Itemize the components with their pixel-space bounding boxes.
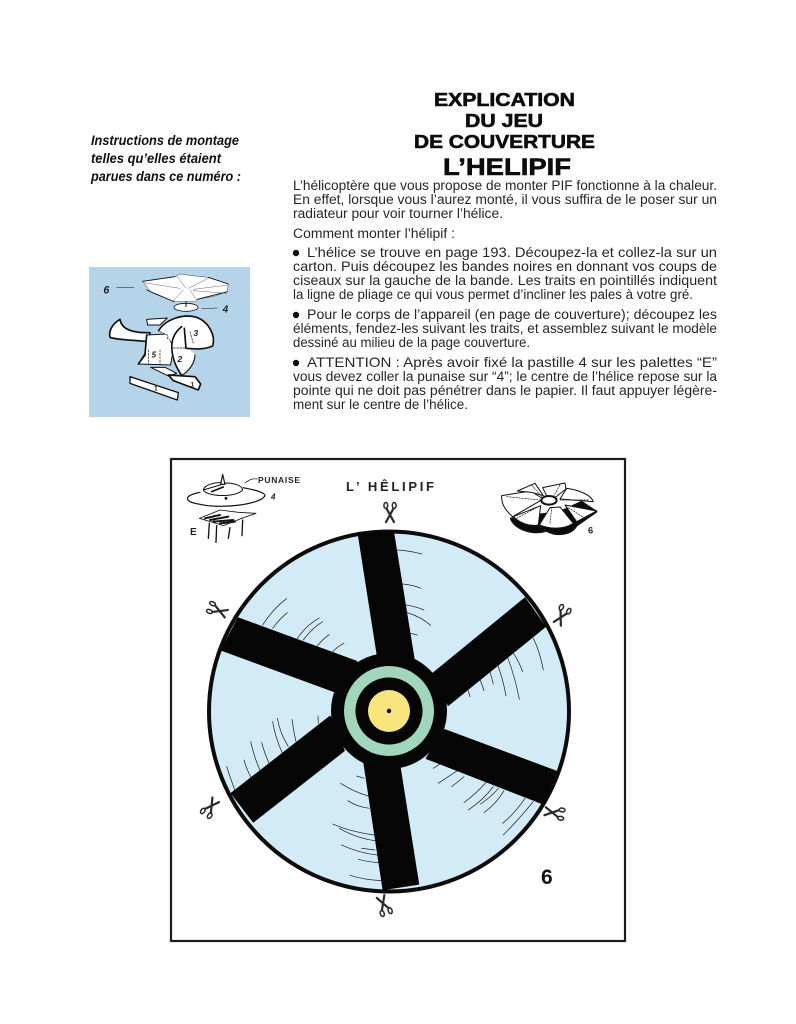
text block: instructions: ciseaux sur la gauche de la bande. Les traits en pointillés indiquent — [293, 273, 717, 288]
icon: pin and palettes diagram — [187, 474, 276, 542]
text block: instructions: radiateur pour voir tourner l’hélice. — [293, 206, 503, 221]
heading: l'helipif: L’ HÊLIPIF — [346, 479, 434, 494]
label: number 6: 6 — [541, 866, 553, 889]
text block: instructions: ment sur le centre de l’hélice. — [293, 397, 468, 412]
label: E: E — [190, 527, 197, 538]
text block: instructions: la ligne de pliage ce qui vous permet d’incliner les pales à votre gré. — [293, 287, 693, 302]
label: 6: 6 — [588, 526, 593, 536]
icon: helicopter body: 2 — [176, 354, 182, 364]
text block: instructions: L’hélicoptère que vous propose de monter PIF fonctionne à la chaleur. — [293, 178, 717, 193]
text block: instructions: ATTENTION : Après avoir fixé la pastille 4 sur les palettes “E” — [307, 355, 717, 370]
text block: instructions: carton. Puis découpez les bandes noires en donnant vos coups de — [293, 259, 717, 274]
text block: instructions: dessiné au milieu de la page couverture. — [293, 335, 530, 350]
text block: instructions: Comment monter l’hélipif : — [293, 226, 455, 241]
heading: explanation title: DU JEU — [465, 110, 543, 131]
label: punaise: PUNAISE — [258, 475, 300, 485]
hatch marks — [227, 550, 543, 881]
panel: helicopter illustration — [89, 267, 250, 417]
heading: explanation title: DE COUVERTURE — [414, 131, 595, 152]
text block: instructions — [293, 178, 718, 412]
text block: instructions: En effet, lorsque vous l’aurez monté, il vous suffira de le poser sur un — [293, 192, 717, 207]
label: 4: 4 — [270, 492, 276, 501]
caption: assembly instructions — [90, 133, 241, 184]
text block: instructions: vous devez coller la punaise sur “4”; le centre de l’hélice repose sur la — [293, 369, 718, 384]
heading: explanation title: EXPLICATION — [434, 89, 575, 110]
black spokes — [222, 533, 557, 889]
panel: helipif cut-out frame — [171, 459, 625, 941]
heading: explanation title — [414, 89, 595, 181]
disc background — [209, 532, 569, 892]
hub — [331, 653, 447, 769]
text block: instructions: pointe qui ne doit pas pénétrer dans le papier. Il faut appuyer légère- — [293, 383, 717, 398]
label: 6: 6 — [103, 284, 109, 296]
caption: assembly instructions: Instructions de montage — [91, 133, 239, 148]
icon: helicopter body: 3 — [193, 328, 198, 338]
icon: helicopter body — [110, 316, 213, 400]
text block: instructions: Pour le corps de l’appareil (en page de couverture); découpez les — [307, 307, 717, 322]
text block: instructions: L’hélice se trouve en page 193. Découpez-la et collez-la sur un — [307, 245, 717, 260]
icon: scissors — [200, 502, 572, 917]
caption: assembly instructions: telles qu’elles étaient — [91, 151, 221, 166]
icon: helicopter body: 5 — [152, 350, 157, 359]
text block: instructions: éléments, fendez-les suivant les traits, et assemblez suivant le modèle — [293, 321, 717, 336]
chart: propeller disc — [209, 532, 569, 892]
caption: assembly instructions: parues dans ce numéro : — [90, 169, 241, 184]
icon: assembled propeller — [502, 483, 597, 536]
heading: explanation title: L’HELIPIF — [443, 154, 571, 181]
icon: helicopter body: 1 — [154, 386, 158, 393]
icon: disc 4: 4 — [222, 305, 229, 316]
icon: rotor 6 — [143, 274, 228, 302]
icon: helicopter body: 1 — [191, 382, 195, 389]
